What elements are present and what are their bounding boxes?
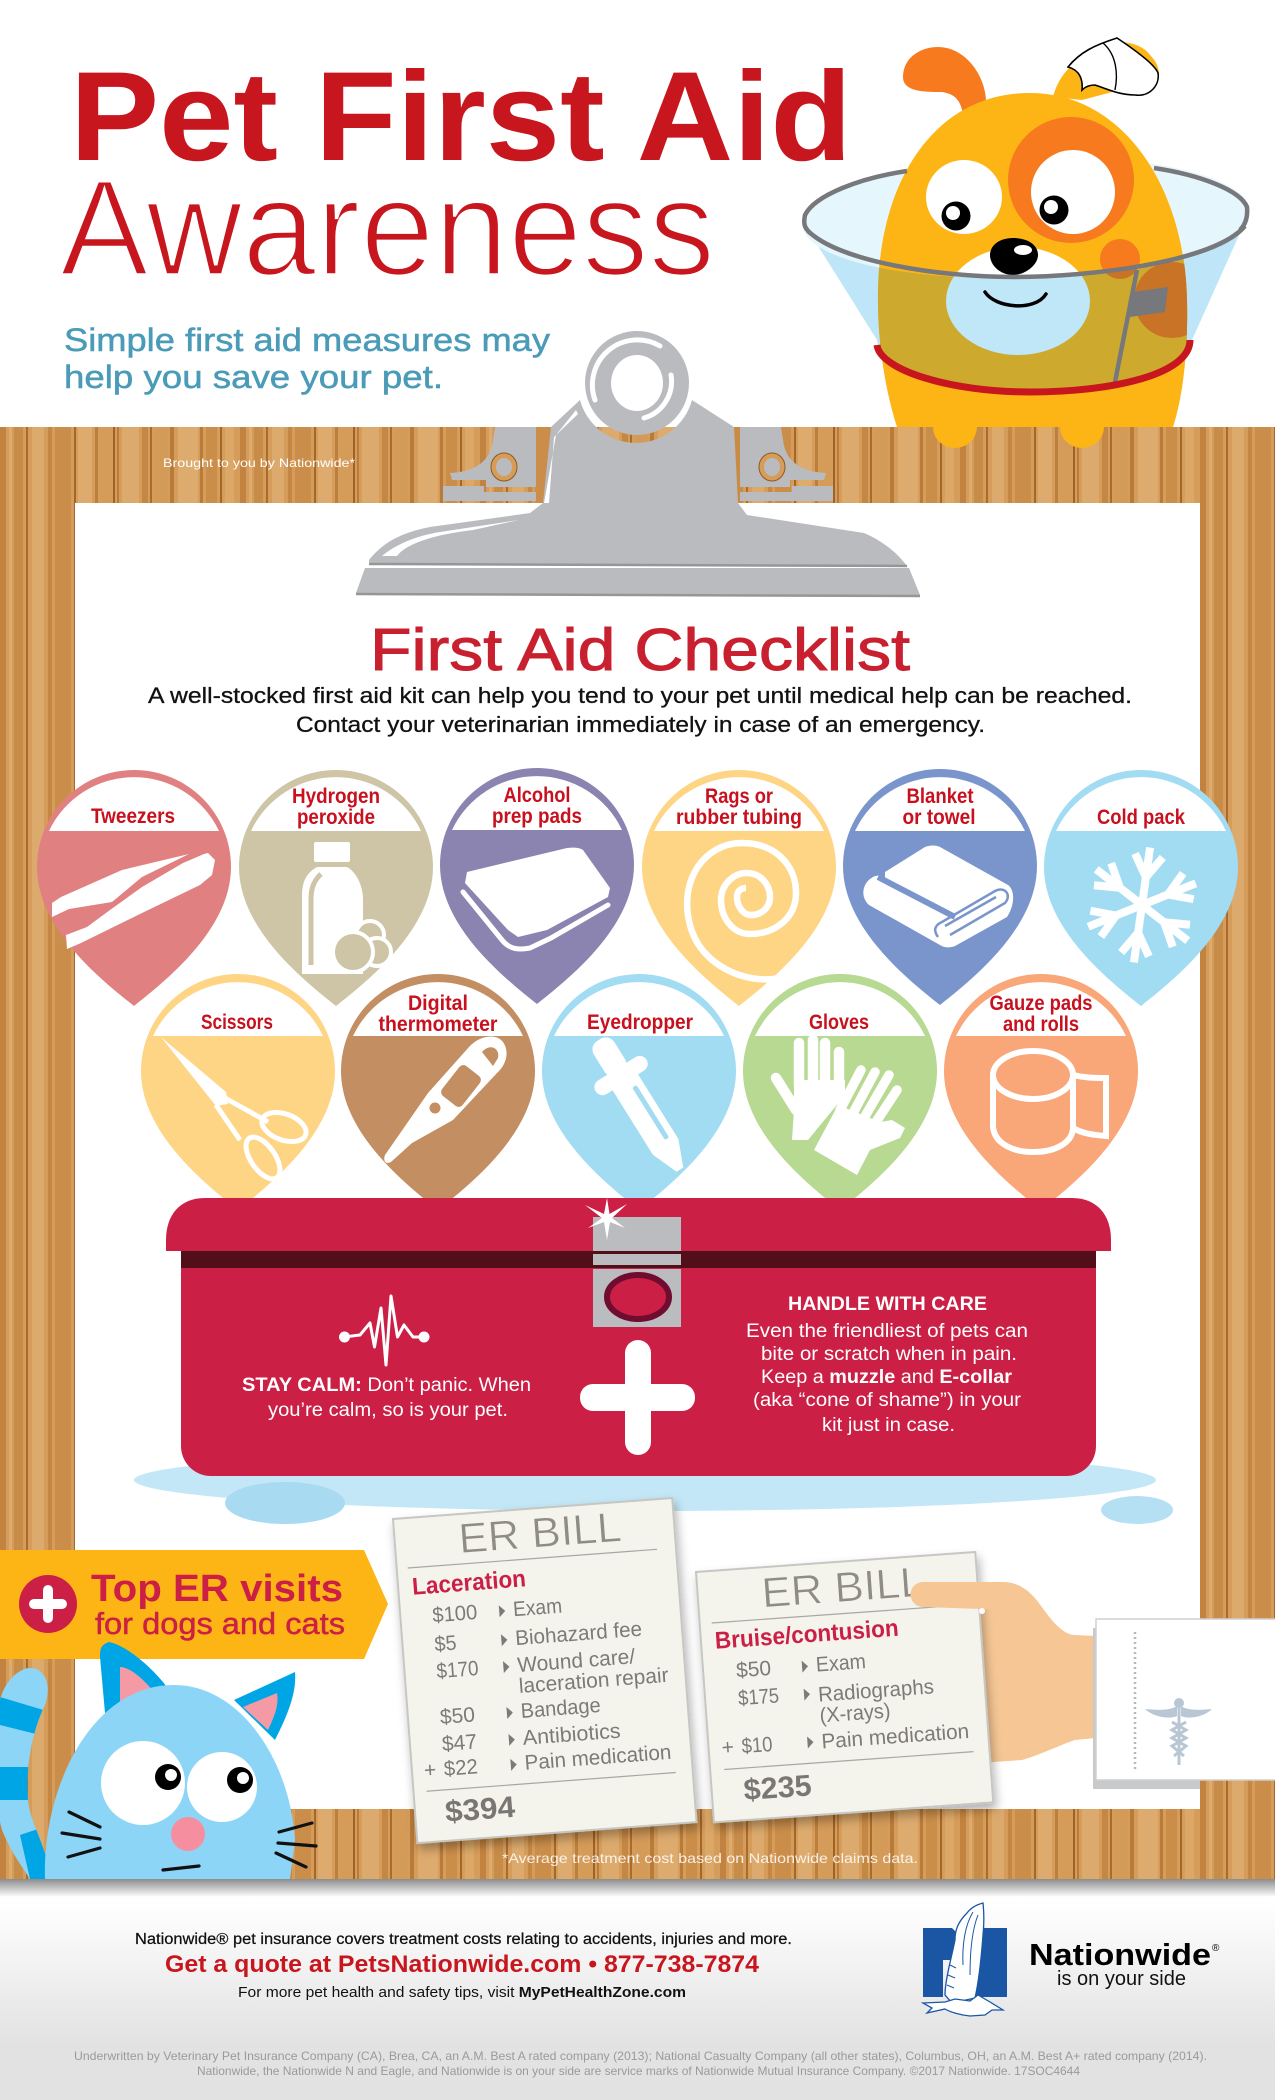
- title: Pet First Aid: [70, 45, 852, 187]
- ER bill: laceration: Exam: [512, 1595, 563, 1621]
- legal text: Nationwide, the Nationwide N and Eagle, and Nationwide is on your side are service marks of Nationwide Mutual Insurance Company. ©2017 Nationwide. 17SOC4644: [197, 2064, 1080, 2078]
- pin: hydrogen peroxide: [239, 770, 433, 1006]
- stay calm text: STAY CALM: Don’t panic. When: [242, 1375, 531, 1396]
- pin: hydrogen peroxide: peroxide: [297, 806, 375, 829]
- footer call to action: Nationwide® pet insurance covers treatment costs relating to accidents, injuries and more.: [135, 1931, 792, 1948]
- pin: gloves: Gloves: [809, 1011, 869, 1034]
- lab coat sleeve: [1093, 1619, 1275, 1789]
- icon: heartbeat: [339, 1296, 430, 1365]
- title: [60, 45, 852, 305]
- pin: gloves: [743, 974, 937, 1210]
- pin: alcohol prep pads: prep pads: [492, 805, 582, 828]
- handle with care text: HANDLE WITH CARE: [788, 1294, 987, 1315]
- pin: tweezers: [37, 770, 231, 1006]
- pin: gauze pads and rolls: and rolls: [1003, 1013, 1079, 1036]
- title: Awareness: [60, 152, 715, 305]
- handle with care text: Even the friendliest of pets can: [746, 1321, 1028, 1342]
- pin: blanket or towel: [843, 769, 1037, 1005]
- banner: top ER visits: Top ER visits: [91, 1568, 343, 1610]
- ER bill: bruise/contusion: $175: [737, 1684, 780, 1710]
- icon: sparkle: [585, 1198, 627, 1240]
- pin: rags or rubber tubing: Rags or: [705, 785, 773, 808]
- pin: hydrogen peroxide: Hydrogen: [292, 785, 380, 808]
- pin: digital thermometer: Digital: [408, 992, 468, 1015]
- hand thumb holding bill: [910, 1582, 1012, 1614]
- ER bill: laceration: $100: [432, 1601, 478, 1627]
- pin: eyedropper: [542, 974, 736, 1210]
- subtitle: [64, 322, 550, 395]
- footer call to action: Get a quote at PetsNationwide.com • 877-738-7874: [165, 1951, 760, 1978]
- ER bill: bruise/contusion: [696, 1552, 993, 1822]
- stay calm text: [242, 1375, 531, 1421]
- ER bill: bruise/contusion: Bruise/contusion: [714, 1615, 899, 1655]
- ER bill: laceration: $22: [443, 1755, 479, 1781]
- dog mascot with cone: [802, 38, 1250, 448]
- metal clip: [356, 331, 920, 596]
- ER bill: laceration: Wound care/: [516, 1645, 636, 1677]
- handle with care text: (aka “cone of shame”) in your: [753, 1390, 1022, 1411]
- pin: alcohol prep pads: [440, 768, 634, 1004]
- ER bill: laceration: $170: [436, 1657, 479, 1683]
- ER bill: laceration: $5: [434, 1632, 457, 1656]
- checklist intro: A well-stocked first aid kit can help you tend to your pet until medical help can be reached.: [148, 683, 1132, 708]
- banner: top ER visits: [0, 1550, 388, 1659]
- footer background: [0, 1879, 1275, 2100]
- checklist intro: [148, 683, 1132, 737]
- pin: rags or rubber tubing: rubber tubing: [676, 806, 802, 829]
- footer call to action: For more pet health and safety tips, visit MyPetHealthZone.com: [238, 1984, 686, 2001]
- ER bill: laceration: $50: [439, 1703, 476, 1729]
- pin: rags or rubber tubing: [642, 770, 836, 1006]
- footer call to action: [135, 1931, 792, 2001]
- ER bill: laceration: Biohazard fee: [514, 1618, 643, 1650]
- pin: eyedropper: Eyedropper: [587, 1011, 693, 1034]
- pin: digital thermometer: [341, 974, 535, 1210]
- pin: alcohol prep pads: Alcohol: [504, 784, 570, 807]
- pin: blanket or towel: Blanket: [906, 785, 974, 808]
- ER bill: bruise/contusion: ER BILL: [760, 1558, 926, 1616]
- nationwide logo: ®: [1212, 1943, 1220, 1954]
- cat mascot: [0, 1642, 316, 1879]
- first aid kit: [166, 1198, 1111, 1476]
- pin: digital thermometer: thermometer: [378, 1013, 498, 1036]
- brought-by credit: Brought to you by Nationwide*: [163, 456, 355, 470]
- handle with care text: Keep a muzzle and E-collar: [761, 1367, 1013, 1388]
- ER bill: bruise/contusion: Exam: [815, 1650, 867, 1677]
- ER bill: laceration: Pain medication: [524, 1741, 672, 1775]
- ER bill: bruise/contusion: Pain medication: [821, 1720, 970, 1753]
- pin: tweezers: Tweezers: [91, 805, 175, 828]
- pin: cold pack: [1044, 770, 1238, 1006]
- cost footnote: *Average treatment cost based on Nationwide claims data.: [502, 1850, 918, 1866]
- ER bill: bruise/contusion: $235: [743, 1769, 813, 1807]
- hand behind bill: [900, 1582, 1096, 1763]
- checklist intro: Contact your veterinarian immediately in case of an emergency.: [296, 712, 985, 737]
- pin: blanket or towel: or towel: [902, 806, 976, 829]
- ER bill: laceration: +: [423, 1758, 437, 1782]
- ER bill: laceration: Bandage: [520, 1694, 601, 1723]
- pin: cold pack: Cold pack: [1097, 806, 1185, 829]
- subtitle: help you save your pet.: [64, 359, 443, 395]
- pin: gauze pads and rolls: Gauze pads: [990, 992, 1092, 1015]
- pin: scissors: [141, 974, 335, 1210]
- icon: N and eagle: [923, 1903, 1007, 2016]
- ER bill: laceration: ER BILL: [457, 1503, 623, 1562]
- subtitle: Simple first aid measures may: [64, 322, 550, 358]
- icon: white cross: [580, 1340, 695, 1455]
- checklist heading: First Aid Checklist: [370, 617, 910, 683]
- ER bill: bruise/contusion: Radiographs: [817, 1675, 935, 1707]
- ER bill: laceration: $394: [444, 1791, 517, 1829]
- ER bill: bruise/contusion: +: [721, 1736, 735, 1760]
- icon: red plus: [19, 1575, 77, 1633]
- pin: gauze pads and rolls: [944, 974, 1138, 1210]
- ER bill: bruise/contusion: $10: [741, 1733, 773, 1758]
- handle with care text: bite or scratch when in pain.: [761, 1344, 1017, 1365]
- banner: top ER visits: for dogs and cats: [95, 1606, 345, 1641]
- white paper on clipboard: [75, 503, 1200, 1809]
- legal text: Underwritten by Veterinary Pet Insurance Company (CA), Brea, CA, an A.M. Best A rated company (2013); National Casualty Company (all other states), Columbus, OH, an A.M. Best A+ rated company (2014).: [74, 2049, 1207, 2063]
- icon: caduceus: [1145, 1698, 1212, 1765]
- handle with care text: [746, 1294, 1028, 1436]
- ER bill: bruise/contusion: $50: [735, 1657, 772, 1682]
- pin: scissors: Scissors: [201, 1011, 273, 1034]
- nationwide logo: [923, 1903, 1220, 2016]
- ER bill: laceration: Laceration: [411, 1565, 527, 1601]
- wood clipboard background: [0, 427, 1275, 1879]
- puddle under kit: [134, 1449, 1173, 1524]
- ER bill: laceration: [393, 1498, 697, 1843]
- nationwide logo: is on your side: [1057, 1968, 1186, 1990]
- handle with care text: kit just in case.: [822, 1415, 955, 1436]
- ER bill: laceration: laceration repair: [518, 1664, 669, 1698]
- nationwide logo: Nationwide: [1029, 1937, 1211, 1972]
- ER bill: laceration: Antibiotics: [522, 1720, 621, 1750]
- latch: [593, 1217, 681, 1327]
- ER bill: laceration: $47: [441, 1730, 478, 1756]
- ER bill: bruise/contusion: (X-rays): [819, 1699, 891, 1728]
- legal text: [74, 2049, 1207, 2078]
- stay calm text: you’re calm, so is your pet.: [268, 1400, 508, 1421]
